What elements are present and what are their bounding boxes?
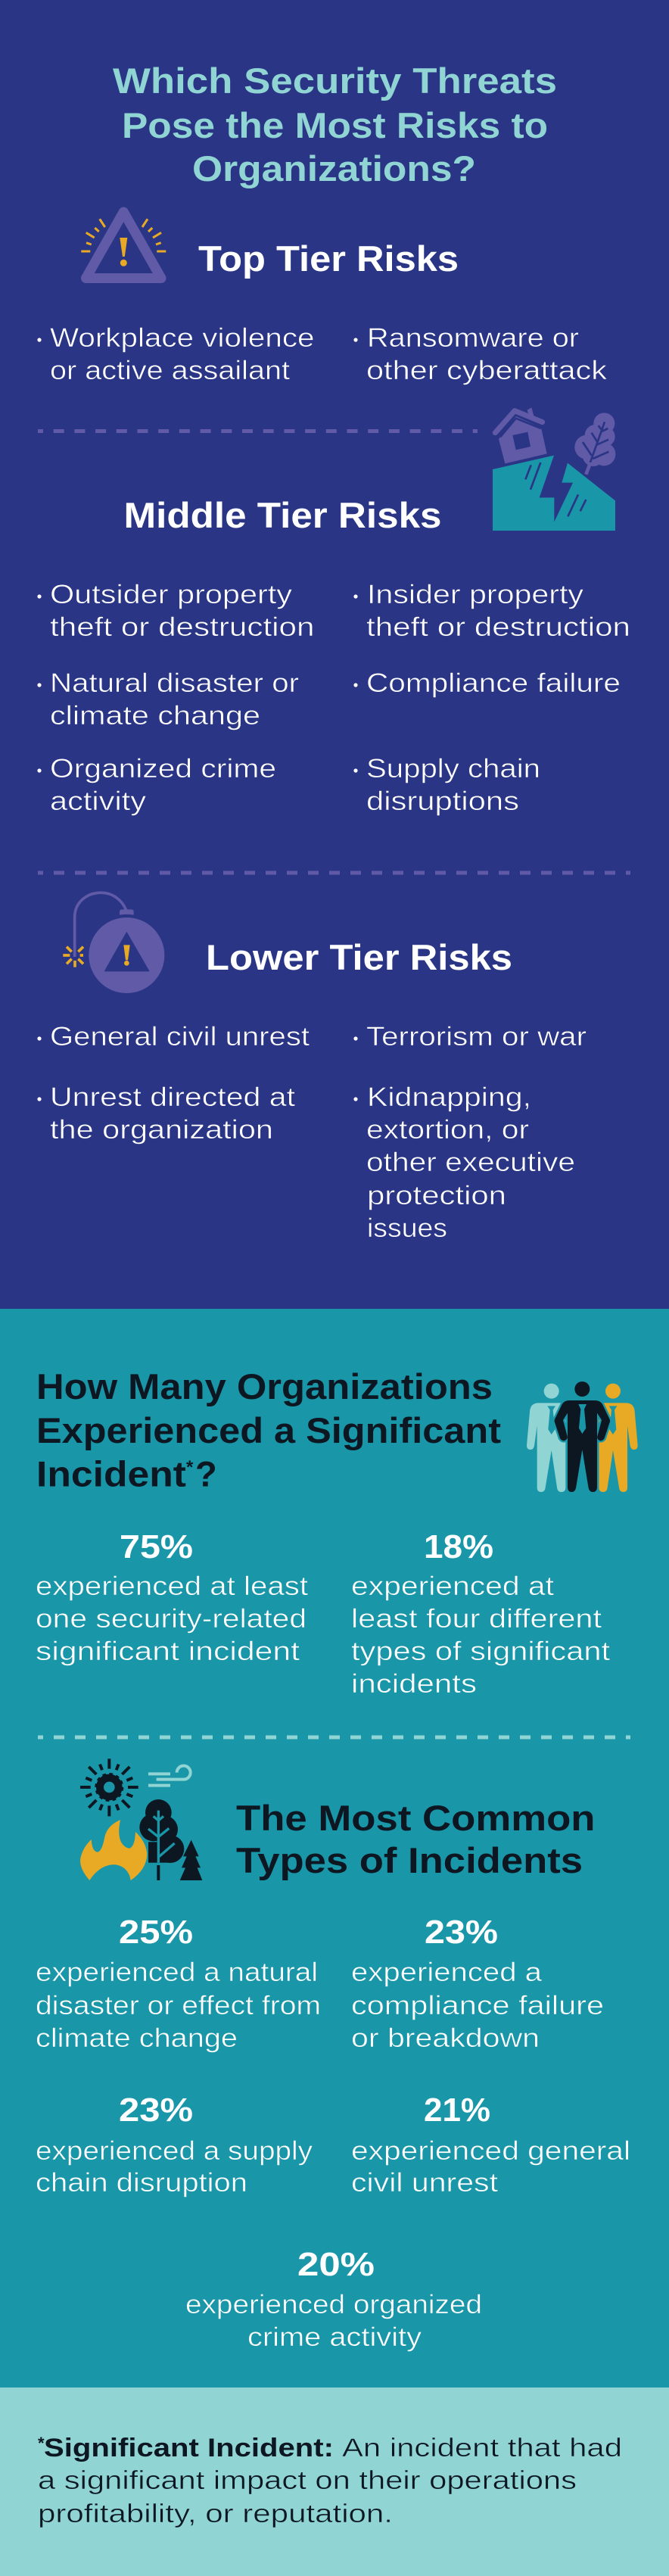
- stat: 23 percent compliance: or breakdown: [351, 2023, 540, 2053]
- list: middle tier risks: Organized crime: [50, 754, 276, 783]
- list: middle tier risks: [37, 580, 630, 816]
- list: top tier risks: other cyberattack: [366, 356, 608, 385]
- list: lower tier risks: Kidnapping,: [367, 1082, 531, 1112]
- stat: 18 percent: 18%: [424, 1528, 493, 1565]
- stat: 18 percent: least four different: [351, 1604, 602, 1634]
- list: middle tier risks: theft or destruction: [366, 612, 630, 642]
- icon: bomb with warning triangle: [63, 892, 164, 993]
- icon: sun, wind, fire and trees: [80, 1758, 202, 1880]
- list: middle tier risks: Insider property: [367, 580, 584, 609]
- stat: 21 percent: experienced general: [351, 2136, 630, 2166]
- stat: 20 percent: 20%: [297, 2246, 375, 2283]
- list: lower tier risks: other executive: [366, 1148, 575, 1177]
- heading: most common types of incidents: Types of Incidents: [236, 1840, 583, 1880]
- panel: security threat risk tiers: [0, 0, 669, 1309]
- list: middle tier risks: Natural disaster or: [50, 668, 299, 698]
- list: lower tier risks: issues: [367, 1213, 447, 1243]
- list: top tier risks: Workplace violence: [50, 323, 315, 353]
- icon: warning triangle: [81, 212, 166, 279]
- stat: 20 percent: [185, 2246, 482, 2352]
- list: lower tier risks: General civil unrest: [50, 1022, 310, 1051]
- stat: 25 percent: 25%: [119, 1914, 193, 1951]
- title: Pose the Most Risks to: [122, 105, 548, 145]
- stat: 25 percent: climate change: [36, 2023, 238, 2053]
- stat: 18 percent: [351, 1528, 610, 1699]
- stat: 75 percent: [36, 1528, 308, 1666]
- icon: house and tree on earthquake crack: [493, 407, 615, 531]
- panel: significant incidents: [0, 1309, 669, 2388]
- heading: most common types of incidents: The Most Common: [236, 1798, 595, 1838]
- list: lower tier risks: the organization: [50, 1115, 273, 1145]
- list: middle tier risks: Outsider property: [50, 580, 293, 609]
- stat: 18 percent: experienced at: [351, 1571, 554, 1601]
- list: middle tier risks: theft or destruction: [50, 612, 315, 642]
- stat: 25 percent: experienced a natural: [36, 1958, 318, 1987]
- list: lower tier risks: Unrest directed at: [50, 1082, 295, 1112]
- stat: 75 percent: 75%: [120, 1528, 193, 1565]
- list: middle tier risks: Supply chain: [366, 754, 540, 783]
- stat: 21 percent: 21%: [424, 2092, 490, 2129]
- title: [113, 61, 557, 188]
- list: lower tier risks: Terrorism or war: [366, 1022, 587, 1051]
- list: middle tier risks: Compliance failure: [366, 668, 621, 698]
- stat: 75 percent: one security-related: [36, 1604, 306, 1634]
- heading: how many organizations: Experienced a Significant: [36, 1410, 501, 1450]
- footnote text: a significant impact on their operations: [38, 2466, 577, 2495]
- heading: how many organizations: ?: [195, 1453, 217, 1494]
- footnote text: [38, 2434, 622, 2528]
- heading: lower tier risks: Lower Tier Risks: [206, 937, 512, 977]
- list: top tier risks: or active assailant: [50, 356, 290, 385]
- stat: 25 percent: disaster or effect from: [36, 1991, 321, 2020]
- heading: how many organizations: *: [186, 1457, 194, 1478]
- list: lower tier risks: protection: [367, 1181, 506, 1210]
- footnote text: profitability, or reputation.: [38, 2500, 393, 2528]
- list: top tier risks: [37, 323, 608, 385]
- stat: 20 percent: experienced organized: [185, 2290, 482, 2319]
- title: Which Security Threats: [113, 61, 557, 101]
- footnote text: *: [38, 2434, 45, 2453]
- stat: 23 percent supply chain: experienced a supply: [36, 2136, 313, 2166]
- stat: 75 percent: significant incident: [36, 1637, 300, 1666]
- stat: 25 percent: [36, 1914, 321, 2053]
- stat: 75 percent: experienced at least: [36, 1571, 308, 1601]
- stat: 23 percent supply chain: chain disruption: [36, 2168, 247, 2198]
- list: middle tier risks: activity: [50, 787, 147, 816]
- icon: three business people: [527, 1381, 638, 1492]
- heading: top tier risks: Top Tier Risks: [198, 238, 459, 279]
- list: middle tier risks: climate change: [50, 701, 260, 730]
- list: middle tier risks: disruptions: [366, 787, 519, 816]
- stat: 23 percent compliance: 23%: [425, 1914, 498, 1951]
- heading: how many organizations: [36, 1366, 501, 1494]
- stat: 23 percent supply chain: [36, 2092, 313, 2198]
- heading: middle tier risks: Middle Tier Risks: [124, 495, 442, 535]
- heading: how many organizations: Incident: [36, 1453, 186, 1494]
- list: lower tier risks: extortion, or: [366, 1115, 529, 1145]
- footnote text: An incident that had: [342, 2434, 622, 2462]
- list: top tier risks: Ransomware or: [367, 323, 579, 353]
- stat: 23 percent compliance: [351, 1914, 604, 2053]
- footnote text: Significant Incident:: [44, 2434, 334, 2462]
- heading: most common types of incidents: [236, 1798, 595, 1880]
- stat: 20 percent: crime activity: [247, 2322, 422, 2352]
- list: lower tier risks: [37, 1022, 587, 1243]
- stat: 21 percent: [351, 2092, 630, 2198]
- stat: 18 percent: incidents: [351, 1669, 477, 1699]
- stat: 23 percent compliance: experienced a: [351, 1958, 543, 1987]
- stat: 23 percent compliance: compliance failure: [351, 1991, 604, 2020]
- stat: 21 percent: civil unrest: [351, 2168, 498, 2198]
- stat: 18 percent: types of significant: [351, 1637, 610, 1666]
- title: Organizations?: [192, 148, 476, 188]
- panel: footnote definition: [0, 2388, 669, 2576]
- stat: 23 percent supply chain: 23%: [119, 2092, 193, 2129]
- heading: how many organizations: How Many Organizations: [36, 1366, 493, 1406]
